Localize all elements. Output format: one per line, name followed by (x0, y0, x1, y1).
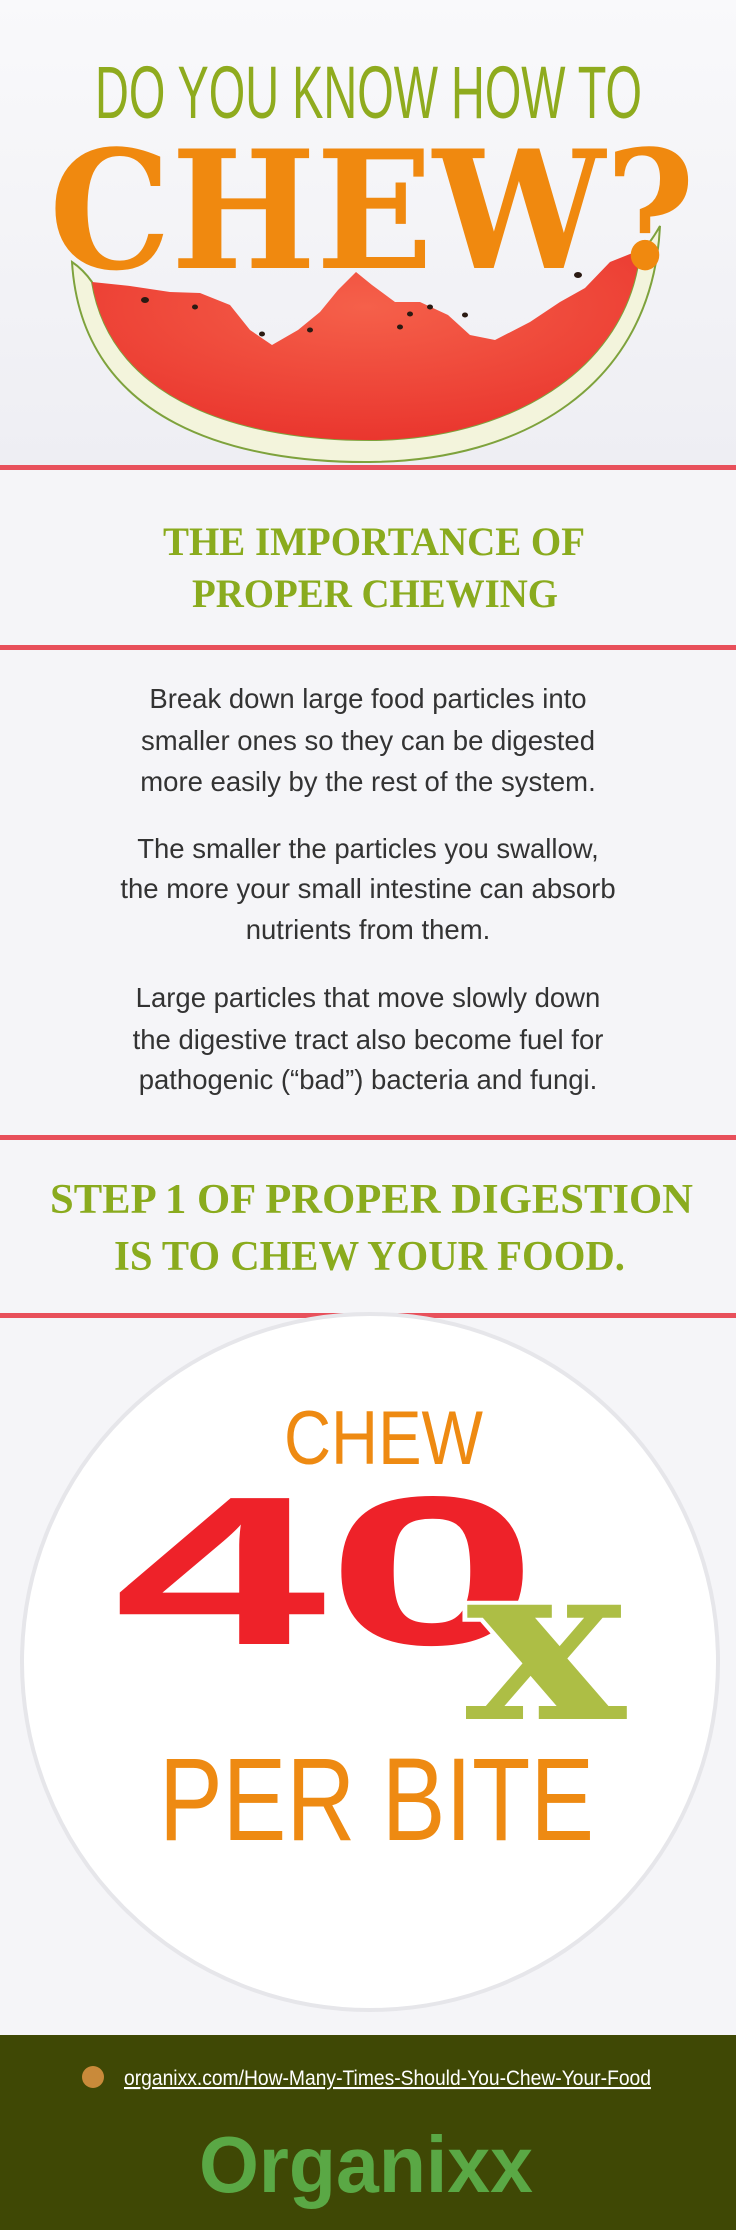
icon: link (82, 2066, 104, 2088)
text block: chewing benefits: Break down large food particles into (149, 683, 587, 714)
badge number 40: 40 (114, 1452, 538, 1689)
text block: chewing benefits: more easily by the rest of the system. (140, 766, 596, 797)
watermelon illustration (72, 226, 660, 462)
text block: chewing benefits: smaller ones so they can be digested (141, 725, 595, 756)
text block: chewing benefits (120, 683, 616, 1095)
divider lines (0, 465, 736, 1318)
text block: chewing benefits: the more your small intestine can absorb (120, 873, 616, 904)
heading: importance: THE IMPORTANCE OF (163, 519, 585, 564)
heading: step 1 (50, 1177, 693, 1280)
logo: Organixx (199, 2120, 533, 2209)
text block: chewing benefits: pathogenic (“bad”) bacteria and fungi. (139, 1064, 597, 1095)
heading: step 1: IS TO CHEW YOUR FOOD. (114, 1234, 625, 1280)
badge text: CHEW: CHEW (284, 1396, 483, 1481)
text block: chewing benefits: Large particles that move slowly down (136, 982, 600, 1013)
text block: chewing benefits: The smaller the particles you swallow, (137, 833, 599, 864)
title CHEW?: CHEW? (49, 114, 695, 307)
footer (0, 2035, 736, 2230)
hero background (0, 0, 736, 467)
badge letter x: x (466, 1512, 627, 1771)
source url: organixx.com/How-Many-Times-Should-You-Chew-Your-Food (124, 2067, 651, 2090)
heading: importance (163, 519, 585, 616)
text block: chewing benefits: nutrients from them. (246, 914, 490, 945)
heading: step 1: STEP 1 OF PROPER DIGESTION (50, 1177, 693, 1223)
badge text: PER BITE: PER BITE (159, 1734, 594, 1866)
circle badge (22, 1314, 718, 2010)
text block: chewing benefits: the digestive tract also become fuel for (133, 1024, 603, 1055)
heading: importance: PROPER CHEWING (192, 571, 558, 616)
